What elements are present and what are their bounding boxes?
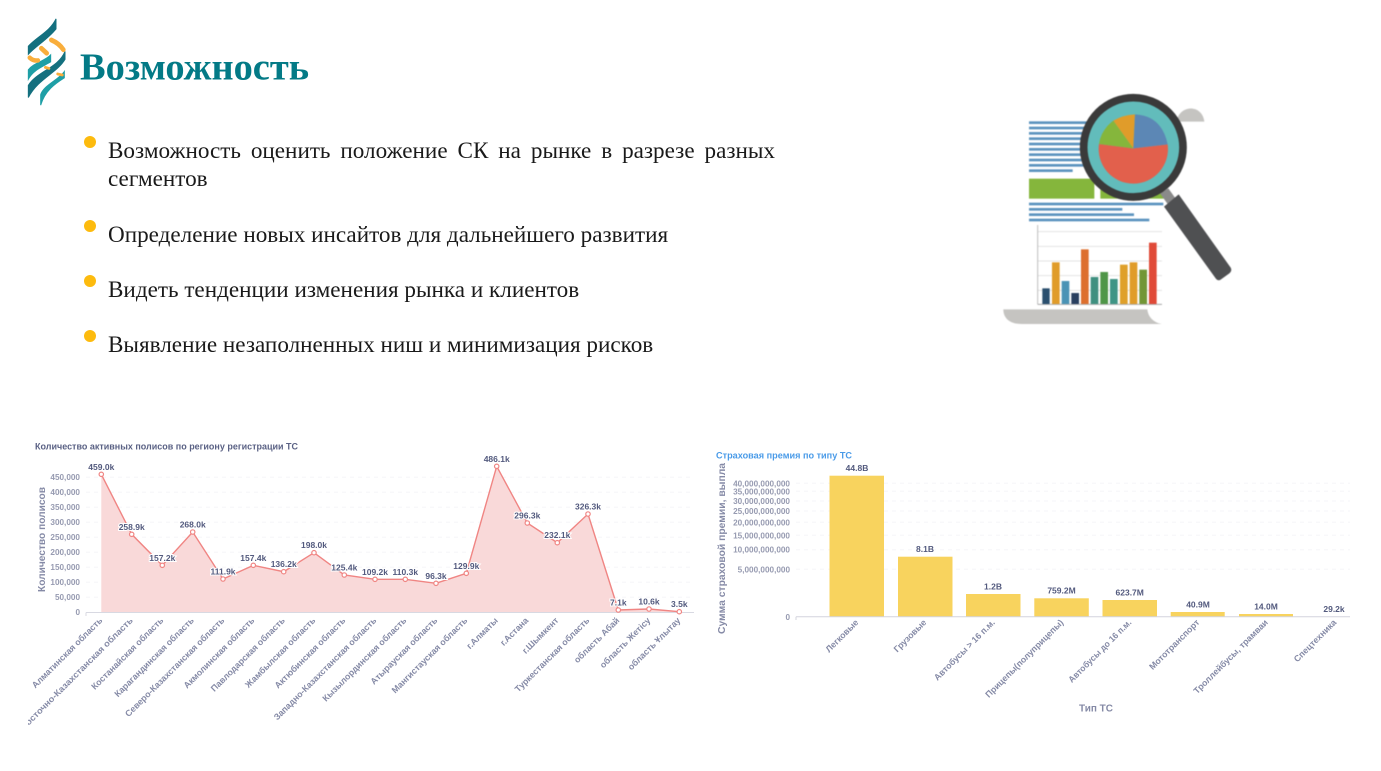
data labels: 110.3k	[393, 567, 418, 577]
x-axis region labels: г.Астана	[498, 615, 530, 648]
logo	[28, 18, 66, 106]
data labels: 96.3k	[425, 571, 447, 581]
data labels: 232.1k	[544, 530, 571, 540]
y-axis ticks	[733, 479, 790, 622]
y-axis ticks	[50, 473, 80, 617]
y-axis ticks: 15,000,000,000	[733, 531, 790, 540]
data labels: 623.7M	[1116, 587, 1144, 597]
y-axis ticks: 200,000	[50, 548, 80, 557]
data labels: 3.5k	[671, 599, 688, 609]
x-axis type labels	[824, 617, 1338, 699]
bullet text 3: Видеть тенденции изменения рынка и клиентов	[108, 277, 579, 303]
data labels: 486.1k	[484, 454, 510, 464]
y-axis ticks: 150,000	[50, 563, 80, 572]
data labels: 268.0k	[180, 520, 206, 530]
y-axis ticks: 350,000	[50, 503, 80, 512]
data labels: 1.2B	[984, 581, 1002, 591]
area fill	[101, 466, 679, 612]
x-axis type labels: Спецтехника	[1292, 617, 1338, 664]
bar chart: insurance premium by vehicle type	[716, 450, 1350, 714]
data labels	[88, 454, 688, 609]
y-axis ticks: 0	[75, 608, 80, 617]
y-axis ticks: 50,000	[55, 593, 80, 602]
x-axis region labels: Мангистауская область	[390, 615, 470, 695]
x-axis region labels: Западно-Казахстанская область	[272, 615, 379, 722]
x-axis region labels: г.Алматы	[464, 615, 500, 651]
x-axis region labels: область Абай	[572, 615, 621, 665]
data labels: 111.9k	[210, 566, 236, 576]
x-axis region labels: Костанайская область	[89, 615, 166, 692]
bullet text 1: Возможность оценить положение СК на рынке в разрезе разных сегментов	[108, 138, 775, 192]
x-axis region labels: Атырауская область	[368, 615, 440, 686]
y-axis ticks: 40,000,000,000	[733, 479, 790, 488]
data labels: 14.0M	[1254, 601, 1278, 611]
line series	[101, 466, 679, 612]
data labels: 129.9k	[453, 561, 480, 571]
bullet marker 1	[84, 136, 96, 148]
x-axis region labels	[18, 615, 682, 732]
title: Возможность	[80, 46, 309, 88]
y-axis title: Количество полисов	[36, 486, 48, 592]
data labels: 7.1k	[610, 598, 627, 608]
y-axis ticks: 450,000	[50, 473, 80, 482]
y-axis ticks: 300,000	[50, 518, 80, 527]
data labels: 109.2k	[362, 567, 388, 577]
data markers	[99, 464, 682, 614]
icon: report with magnifying glass	[1003, 93, 1232, 324]
y-axis ticks: 35,000,000,000	[733, 487, 790, 496]
x-axis type labels: Мототранспорт	[1147, 617, 1202, 672]
x-axis region labels: область Жетісу	[598, 615, 652, 670]
y-axis ticks: 250,000	[50, 533, 80, 542]
x-axis type labels: Автобусы до 16 п.м.	[1066, 617, 1133, 685]
bullet text 4: Выявление незаполненных ниш и минимизация рисков	[108, 332, 653, 358]
x-axis type labels: Грузовые	[892, 617, 928, 654]
data labels: 40.9M	[1186, 599, 1210, 609]
y-axis ticks: 30,000,000,000	[733, 497, 790, 506]
x-axis region labels: Актюбинская область	[272, 615, 348, 690]
y-axis title: Сумма страховой премии, выпла	[716, 463, 728, 634]
data labels: 157.2k	[149, 553, 176, 563]
x-axis region labels: Акмолинская область	[181, 615, 257, 690]
x-axis type labels: Легковые	[824, 617, 860, 654]
data labels: 136.2k	[271, 559, 297, 569]
data labels: 44.8B	[846, 463, 868, 473]
x-axis region labels: Алматинская область	[30, 615, 105, 690]
bullet marker 2	[84, 220, 96, 232]
y-axis ticks: 0	[785, 613, 790, 622]
chart title: Страховая премия по типу ТС	[716, 450, 853, 460]
bullet text 2: Определение новых инсайтов для дальнейшего развития	[108, 222, 668, 248]
bullet marker 4	[84, 330, 96, 342]
x-axis region labels: область Ұлытау	[626, 615, 682, 672]
data labels: 8.1B	[916, 544, 934, 554]
x-axis region labels: Северо-Казахстанская область	[123, 615, 227, 719]
data labels: 326.3k	[575, 502, 601, 512]
x-axis region labels: Кызылординская область	[320, 615, 409, 703]
data labels	[846, 463, 1345, 614]
x-axis type labels: Троллейбусы, трамваи	[1192, 617, 1270, 696]
chart title: Количество активных полисов по региону регистрации ТС	[35, 442, 298, 452]
x-axis region labels: г.Шымкент	[520, 615, 561, 656]
x-axis region labels: Восточно-Казахстанская область	[18, 615, 135, 732]
data labels: 759.2M	[1047, 586, 1076, 596]
x-axis type labels: Прицепы(полуприцепы)	[983, 617, 1065, 699]
y-axis ticks: 100,000	[50, 578, 80, 587]
y-axis ticks: 10,000,000,000	[733, 546, 790, 555]
x-axis region labels: Павлодарская область	[209, 615, 287, 694]
y-axis ticks: 25,000,000,000	[733, 507, 790, 516]
data labels: 296.3k	[514, 510, 541, 520]
y-axis ticks: 5,000,000,000	[738, 565, 790, 574]
data labels: 157.4k	[240, 553, 267, 563]
x-axis title: Тип ТС	[1079, 704, 1113, 714]
x-axis region labels: Туркестанская область	[513, 615, 592, 694]
bars	[830, 476, 1293, 616]
x-axis region labels: Жамбылская область	[242, 615, 318, 690]
line chart: active policies by region	[28, 442, 694, 725]
data labels: 10.6k	[638, 596, 660, 606]
x-axis type labels: Автобусы > 16 п.м.	[932, 617, 997, 682]
data labels: 459.0k	[88, 462, 115, 472]
data labels: 258.9k	[119, 522, 145, 532]
data labels: 198.0k	[301, 540, 327, 550]
data labels: 125.4k	[331, 562, 358, 572]
data labels: 29.2k	[1323, 604, 1345, 614]
y-axis ticks: 400,000	[50, 488, 80, 497]
y-axis ticks: 20,000,000,000	[733, 518, 790, 527]
bullet marker 3	[84, 275, 96, 287]
x-axis region labels: Карагандинская область	[112, 615, 196, 699]
